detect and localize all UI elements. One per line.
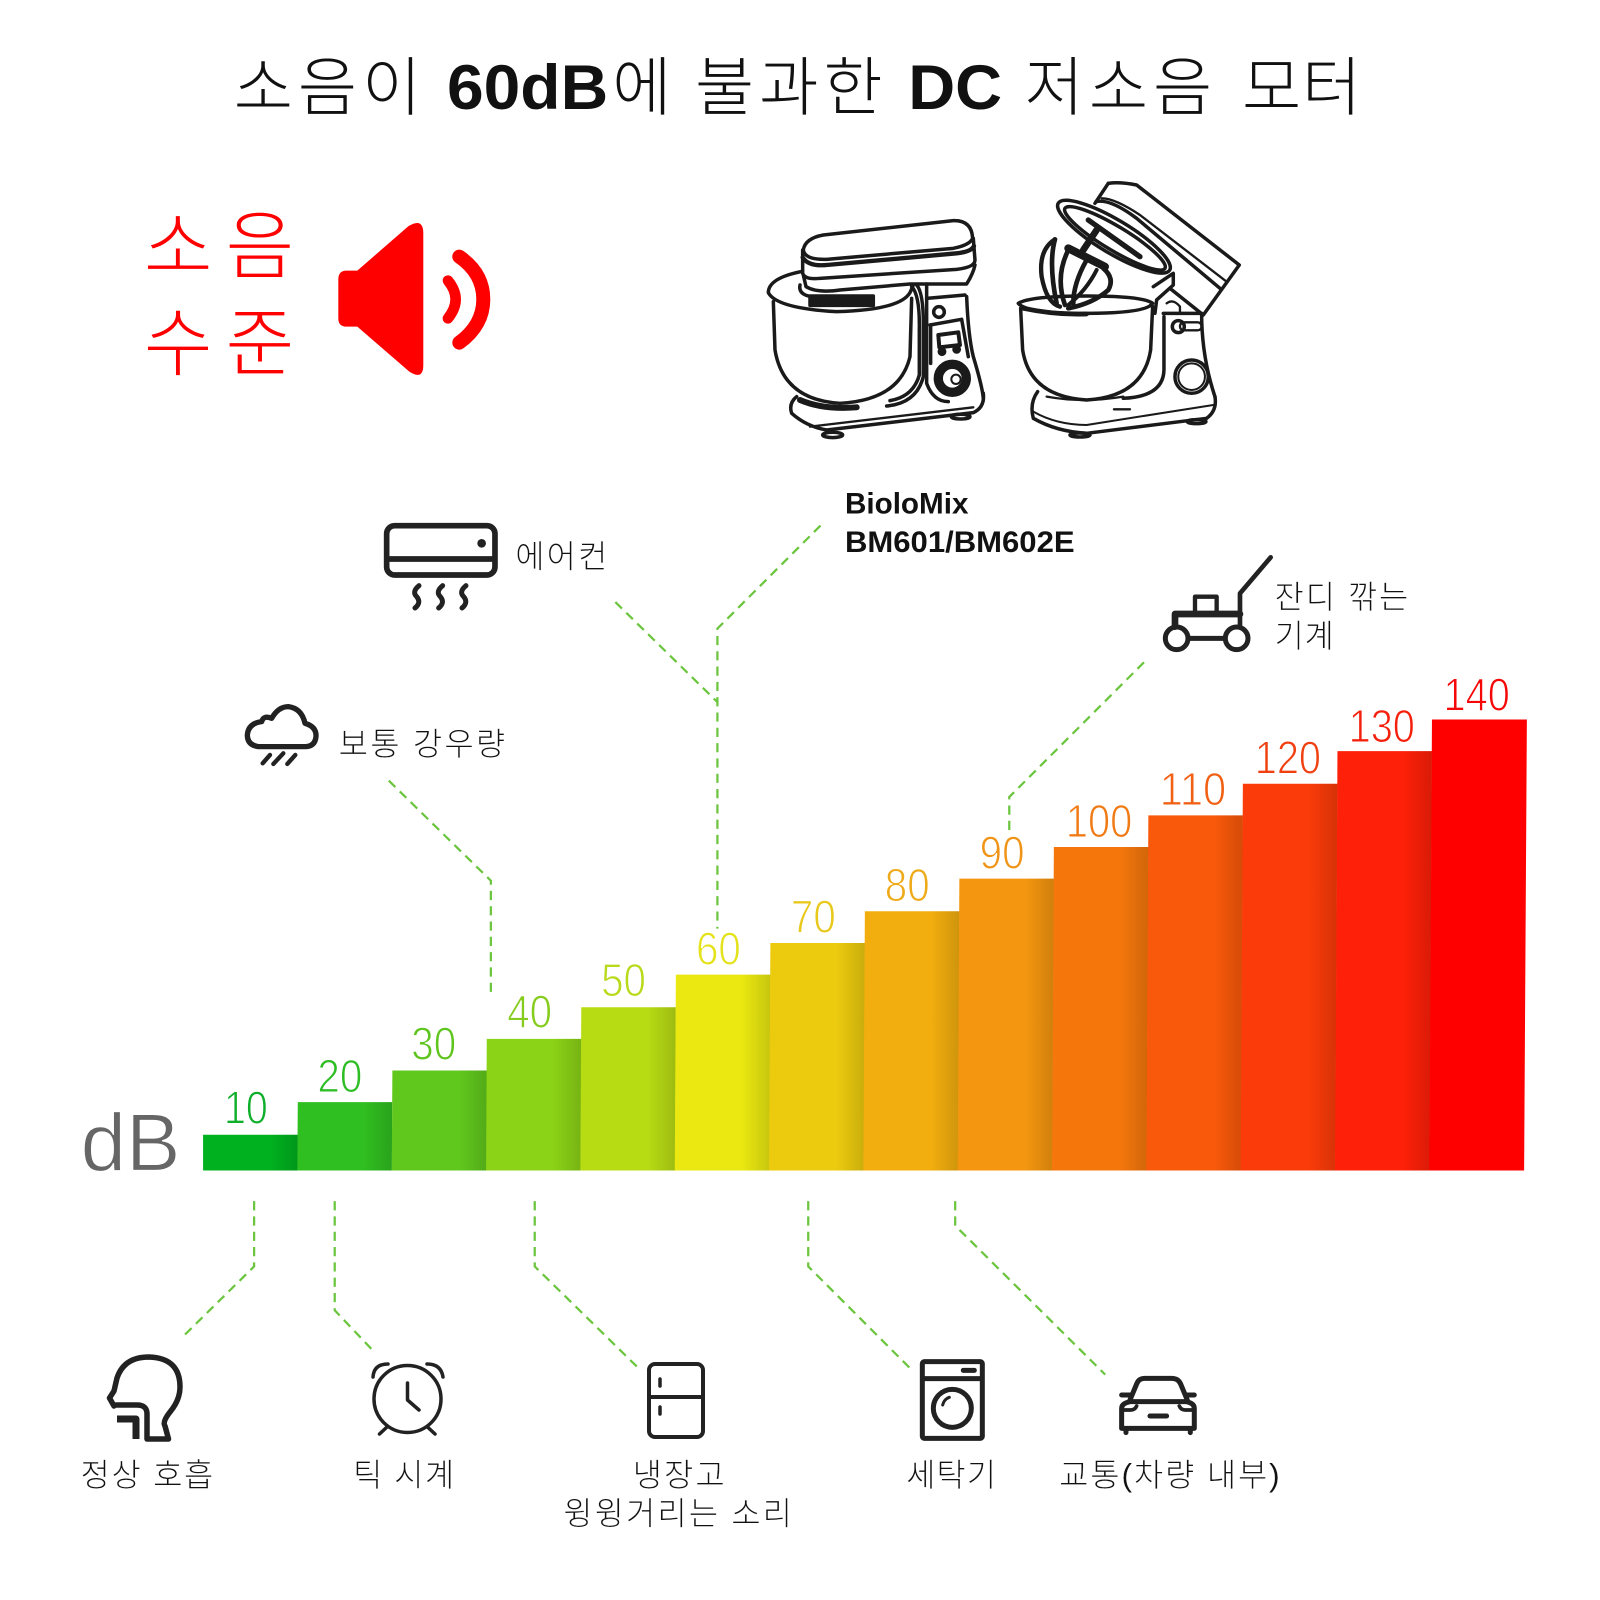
label: moderate rain: 보통 강우량 <box>339 726 505 762</box>
connector: clock <box>335 1201 374 1351</box>
bar: 120 dB <box>1241 784 1337 1171</box>
bar: 60 dB <box>675 975 770 1171</box>
bar: 110 dB <box>1146 815 1243 1171</box>
bar: 90 dB <box>958 879 1054 1171</box>
value 120: 120 <box>1255 732 1321 784</box>
connector: air conditioner <box>615 602 717 702</box>
icon: stand mixer closed <box>768 221 984 438</box>
label: BioloMix model: BM601/BM602E <box>845 526 1075 559</box>
value 140: 140 <box>1443 668 1510 720</box>
value 10: 10 <box>224 1082 268 1134</box>
bar: 140 dB <box>1429 719 1527 1171</box>
icon: car <box>1122 1378 1194 1433</box>
label: air conditioner: 에어컨 <box>515 538 607 574</box>
db axis label: dB <box>81 1098 180 1189</box>
title: 불과한 <box>695 52 888 124</box>
value 50: 50 <box>601 954 646 1006</box>
connector: washer <box>808 1201 910 1368</box>
icon: speaker <box>338 223 483 375</box>
label: washing machine: 세탁기 <box>906 1457 996 1493</box>
value 40: 40 <box>507 986 552 1038</box>
value 130: 130 <box>1349 700 1415 752</box>
bar: 50 dB <box>580 1007 676 1171</box>
bar: 80 dB <box>863 911 959 1171</box>
icon: air conditioner <box>387 526 495 608</box>
connector: rain <box>389 781 491 997</box>
value 20: 20 <box>317 1050 362 1102</box>
value 90: 90 <box>980 826 1025 878</box>
title: 60dB <box>447 53 608 123</box>
value 80: 80 <box>885 859 930 911</box>
title: DC <box>908 53 1002 123</box>
connector: fridge <box>535 1201 639 1368</box>
bar: 40 dB <box>486 1039 581 1171</box>
title: 에 <box>612 52 671 124</box>
value 100: 100 <box>1066 795 1132 847</box>
icon: stand mixer tilted <box>1018 183 1239 437</box>
label: traffic in car: 교통(차량 내부) <box>1059 1457 1280 1493</box>
title: 모터 <box>1242 52 1362 124</box>
icon: head with airway <box>110 1357 180 1439</box>
value 70: 70 <box>791 891 836 943</box>
bar: 30 dB <box>392 1071 487 1171</box>
connector: lawn mower <box>1009 662 1144 832</box>
label: lawn mower: 기계 <box>1275 618 1334 654</box>
label: BioloMix model: BioloMix <box>845 487 969 520</box>
label: lawn mower: 잔디 깎는 <box>1275 579 1408 615</box>
label: fridge hum: 냉장고 <box>633 1457 725 1493</box>
noise level heading: 소음 <box>144 205 307 288</box>
db value labels <box>224 668 1510 1134</box>
label: normal breathing: 정상 호흡 <box>81 1457 213 1493</box>
bar chart <box>203 719 1527 1171</box>
icon: fridge <box>649 1364 703 1437</box>
bar: 130 dB <box>1335 751 1432 1171</box>
connector: breathing <box>184 1201 254 1336</box>
connector: traffic <box>955 1201 1105 1375</box>
bar: 100 dB <box>1052 847 1148 1171</box>
label: fridge hum: 윙윙거리는 소리 <box>563 1496 792 1532</box>
icon: washing machine <box>922 1362 982 1438</box>
title: 소음이 <box>234 52 426 124</box>
value 60: 60 <box>696 922 741 974</box>
bar: 70 dB <box>769 943 865 1171</box>
label: ticking clock: 틱 시계 <box>353 1457 454 1493</box>
value 30: 30 <box>411 1017 456 1069</box>
bar: 10 dB <box>203 1135 298 1171</box>
value 110: 110 <box>1160 763 1226 815</box>
title: 저소음 <box>1025 52 1217 124</box>
icon: rain cloud <box>247 707 316 764</box>
icon: lawn mower <box>1165 557 1271 650</box>
bar: 20 dB <box>297 1102 392 1171</box>
noise level heading: 수준 <box>144 302 307 385</box>
connector: BioloMix <box>717 526 820 929</box>
icon: alarm clock <box>373 1364 443 1434</box>
